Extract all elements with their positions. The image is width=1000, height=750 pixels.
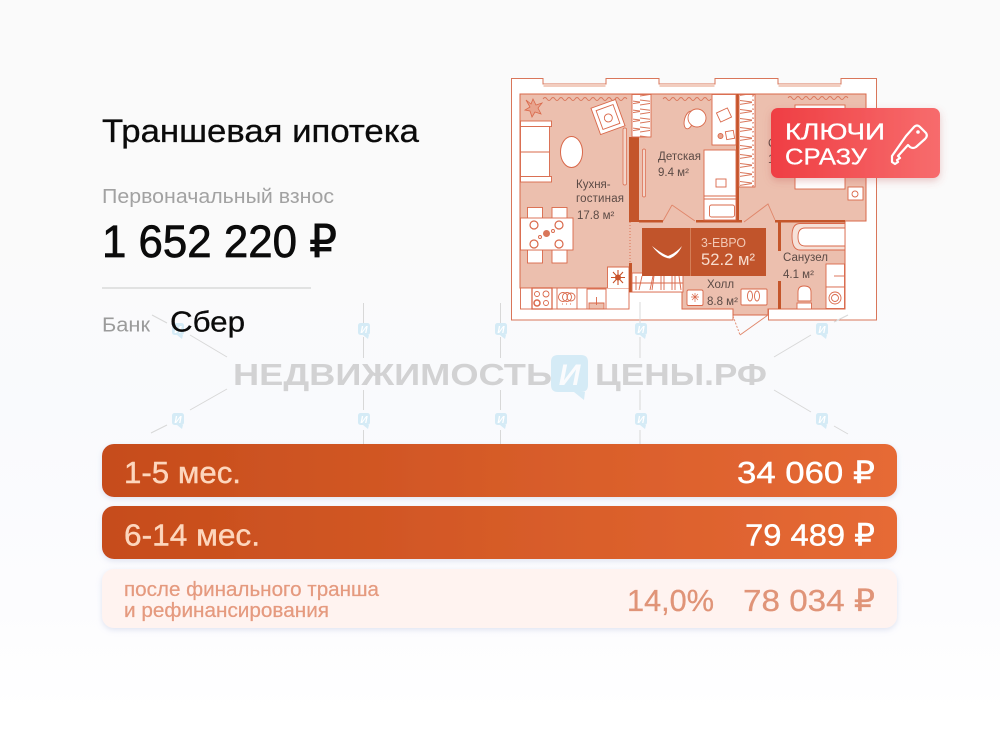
sink and washer [826, 264, 844, 308]
desk [712, 94, 736, 145]
armchair [591, 99, 625, 135]
room labels: Кухня- [576, 179, 611, 191]
bar: months 6-14: 6-14 мес. [124, 518, 260, 552]
small watermark bubbles: И [637, 325, 645, 336]
bar: after refinancing: после финального транша [124, 579, 380, 601]
apartment type badge: 52.2 м² [701, 250, 755, 269]
door leaves [623, 128, 646, 197]
apartment type badge [642, 228, 766, 276]
sofa [520, 121, 552, 182]
apartment type badge: 3-ЕВРО [701, 236, 746, 250]
bedroom bed [795, 105, 863, 200]
bath [792, 224, 845, 250]
bar: months 1-5: 1-5 мес. [124, 455, 241, 490]
bank value: Сбер [170, 306, 245, 338]
watermark logo [551, 355, 588, 400]
kid bed [704, 150, 736, 220]
small watermark bubbles: И [174, 415, 182, 426]
toilet [797, 286, 812, 309]
walls [629, 94, 845, 309]
floor plan [512, 78, 876, 335]
outer walls [512, 78, 876, 320]
room labels: Детская [658, 151, 701, 163]
small watermark bubbles: И [818, 325, 826, 336]
door swings [630, 204, 775, 335]
plant [525, 99, 542, 117]
bar: after refinancing: 14,0% [627, 583, 714, 618]
dining table [520, 208, 573, 263]
room labels [576, 138, 828, 308]
room labels: 4.1 м² [783, 269, 814, 281]
bank label: Банк [102, 314, 150, 336]
watermark [151, 302, 848, 444]
icon: key [892, 126, 927, 164]
room labels: Санузел [783, 252, 828, 264]
room floors [520, 94, 866, 315]
divider [102, 288, 311, 289]
room labels: 8.8 м² [707, 296, 738, 308]
down payment value: 1 652 220 ₽ [102, 216, 337, 267]
small watermark bubbles: И [497, 325, 505, 336]
bar: after refinancing: 78 034 ₽ [743, 583, 875, 618]
room labels: 14.5 м² [768, 154, 805, 166]
watermark logo: И [559, 359, 582, 392]
bar: months 6-14: 79 489 ₽ [745, 518, 875, 552]
left closet [632, 94, 651, 137]
office chair [682, 109, 706, 130]
bar: after refinancing [102, 569, 897, 628]
small watermark bubbles: И [360, 325, 368, 336]
callout: keys now: КЛЮЧИ [785, 118, 885, 144]
room labels: Спальня [768, 138, 814, 150]
small watermark bubbles: И [174, 325, 182, 336]
hall mats [687, 289, 767, 306]
oval table [560, 136, 582, 168]
room labels: Холл [707, 279, 734, 291]
room labels: 17.8 м² [577, 210, 614, 222]
watermark lines [151, 302, 848, 444]
small watermark bubbles: И [818, 415, 826, 426]
small watermark bubbles [172, 323, 828, 429]
kitchen bottom furniture [520, 267, 629, 309]
title: Траншевая ипотека [102, 113, 419, 149]
small watermark bubbles: И [360, 415, 368, 426]
small watermark bubbles: И [497, 415, 505, 426]
down payment label: Первоначальный взнос [102, 186, 334, 208]
callout: keys now [771, 108, 940, 178]
bar: months 1-5: 34 060 ₽ [737, 455, 875, 490]
watermark text: ЦЕНЫ.РФ [595, 357, 767, 392]
bar: months 6-14 [102, 506, 897, 559]
right closet [739, 94, 755, 187]
hall closet [632, 273, 683, 292]
bar: after refinancing: и рефинансирования [124, 600, 329, 622]
watermark text: НЕДВИЖИМОСТЬ [233, 357, 552, 392]
small watermark bubbles: И [637, 415, 645, 426]
bar: months 1-5 [102, 444, 897, 497]
room labels: 9.4 м² [658, 167, 689, 179]
radiators [543, 96, 848, 100]
watermark text [233, 357, 767, 392]
callout: keys now: СРАЗУ [785, 144, 867, 170]
room labels: гостиная [576, 193, 624, 205]
